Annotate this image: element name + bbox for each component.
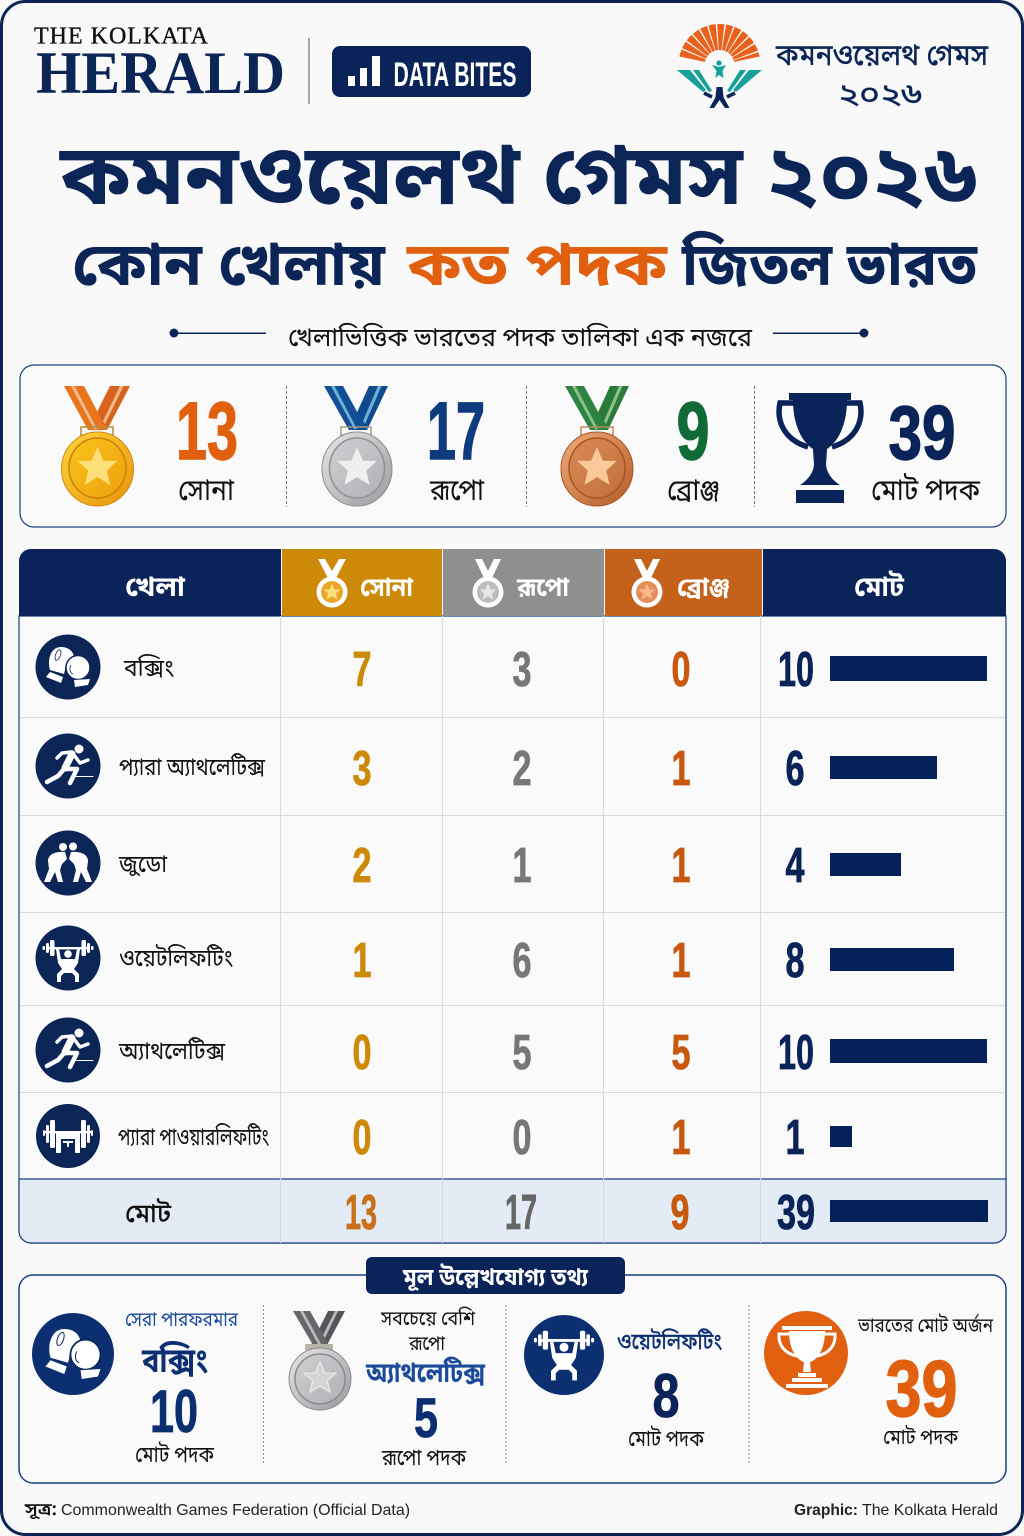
header: publisher masthead: HERALD (36, 40, 285, 106)
row: judo: 4 (786, 839, 804, 893)
gold count (176, 386, 238, 513)
table header: সোনা (360, 572, 414, 607)
highlight: top performer: সেরা পারফরমার (125, 1309, 239, 1335)
trophy icon (779, 393, 861, 503)
silver count: রূপো (429, 473, 485, 513)
row: boxing: 3 (512, 643, 532, 697)
table header: খেলা (125, 571, 186, 608)
title: কমনওয়েলথ গেমস ২০২৬ (59, 128, 977, 239)
table header: মোট (854, 570, 904, 608)
total count (871, 391, 981, 513)
panel: key highlights (19, 1257, 1006, 1483)
highlight: total: ভারতের মোট অর্জন (857, 1312, 994, 1341)
gold medal icon (62, 386, 134, 506)
row: para powerlifting: 0 (512, 1111, 532, 1165)
table header: রূপো (516, 572, 570, 607)
footer: credit (794, 1502, 998, 1519)
highlight: total: 39 (886, 1344, 958, 1433)
highlight: weightlifting: 8 (652, 1362, 680, 1431)
row: para athletics: 6 (786, 742, 804, 796)
footer: source (24, 1499, 410, 1522)
footer: source: সূত্র: (24, 1499, 57, 1522)
silver count (427, 386, 485, 513)
tagline (170, 322, 868, 357)
row: judo: জুডো (118, 850, 168, 882)
row: para athletics: প্যারা অ্যাথলেটিক্স (119, 753, 265, 785)
row: weightlifting: 1 (352, 934, 372, 988)
highlight: most silver: রূপো (408, 1333, 446, 1359)
bronze count: ব্রোঞ্জ (667, 473, 720, 513)
highlight: top performer (32, 1309, 239, 1471)
highlight: most silver: রূপো পদক (381, 1445, 466, 1474)
footer: source: Commonwealth Games Federation (Official Data) (61, 1502, 410, 1519)
bronze header medal (632, 559, 662, 608)
row: para athletics (36, 734, 937, 798)
subtitle headline (72, 231, 978, 310)
footer: credit: The Kolkata Herald (862, 1502, 998, 1519)
row: judo: 1 (672, 839, 690, 893)
gold count: 13 (176, 386, 238, 477)
highlight: most silver: অ্যাথলেটিক্স (365, 1356, 485, 1394)
row: para athletics: 3 (352, 742, 372, 796)
row: athletics: 10 (778, 1026, 814, 1080)
row: athletics: 0 (352, 1026, 372, 1080)
highlight: top performer: 10 (150, 1378, 198, 1445)
row: athletics (36, 1018, 987, 1082)
row: para powerlifting: প্যারা পাওয়ারলিফটিং (118, 1123, 269, 1155)
row: totals: 9 (670, 1186, 690, 1240)
row: boxing: বক্সিং (123, 654, 174, 686)
gold count: সোনা (178, 473, 235, 513)
footer: credit: Graphic: (794, 1502, 858, 1519)
row: athletics: অ্যাথলেটিক্স (118, 1037, 226, 1069)
commonwealth games logo (677, 37, 762, 108)
highlight: total (764, 1311, 994, 1453)
highlight: most silver: 5 (414, 1386, 438, 1449)
bronze count: 9 (676, 386, 710, 477)
highlights heading (366, 1257, 625, 1295)
games name (775, 38, 988, 117)
highlight: most silver (289, 1306, 485, 1474)
data bites badge: DATA BITES (394, 56, 516, 94)
row: weightlifting (36, 926, 954, 990)
row: judo: 2 (352, 839, 372, 893)
table total row background (19, 1179, 1006, 1243)
highlight: weightlifting (524, 1315, 722, 1455)
total count: মোট পদক (871, 472, 981, 513)
silver medal icon (322, 386, 392, 506)
header: publisher masthead: THE KOLKATA (34, 24, 209, 50)
subtitle headline: কোন খেলায় (72, 231, 386, 310)
row: totals: 39 (777, 1186, 815, 1240)
row: totals: 17 (505, 1186, 537, 1240)
highlight: most silver: সবচেয়ে বেশি (380, 1306, 475, 1334)
row: weightlifting: 6 (512, 934, 532, 988)
subtitle headline: জিতল ভারত (681, 231, 978, 310)
medal table (19, 549, 1006, 1243)
table header: ব্রোঞ্জ (677, 572, 730, 607)
highlight: weightlifting: মোট পদক (628, 1426, 704, 1455)
games name: ২০২৬ (838, 77, 922, 117)
row: para athletics: 1 (672, 742, 690, 796)
highlight: weightlifting: ওয়েটলিফটিং (617, 1329, 722, 1358)
row: weightlifting: 8 (786, 934, 804, 988)
tagline: খেলাভিত্তিক ভারতের পদক তালিকা এক নজরে (288, 322, 752, 357)
row: para powerlifting: 0 (352, 1111, 372, 1165)
row: para athletics: 2 (512, 742, 532, 796)
data bites badge (332, 46, 531, 97)
total count: 39 (888, 391, 956, 476)
table header (19, 549, 1006, 616)
row: totals (125, 1186, 988, 1240)
row: boxing: 10 (778, 643, 814, 697)
panel: medal summary (20, 365, 1006, 527)
header divider (308, 38, 310, 104)
row: boxing (36, 634, 987, 700)
highlight: top performer: মোট পদক (135, 1442, 214, 1471)
highlight: top performer: বক্সিং (141, 1340, 208, 1386)
bronze medal icon (561, 386, 633, 506)
bronze count (667, 386, 720, 513)
row: judo: 1 (512, 839, 532, 893)
row: judo (36, 830, 901, 896)
row: para powerlifting: 1 (786, 1111, 804, 1165)
row: athletics: 5 (672, 1026, 690, 1080)
row: para powerlifting (36, 1104, 852, 1168)
row: weightlifting: 1 (672, 934, 690, 988)
row: boxing: 7 (352, 643, 372, 697)
highlight: total: মোট পদক (883, 1425, 959, 1453)
row: weightlifting: ওয়েটলিফটিং (119, 944, 233, 976)
highlights heading: মূল উল্লেখযোগ্য তথ্য (402, 1263, 589, 1295)
row: boxing: 0 (672, 643, 690, 697)
silver header medal (472, 559, 504, 608)
row: para powerlifting: 1 (672, 1111, 690, 1165)
subtitle headline: কত পদক (406, 231, 668, 310)
row: totals: 13 (345, 1186, 377, 1240)
gold header medal (316, 559, 348, 608)
trophy icon white (779, 1326, 835, 1388)
row: totals: মোট (125, 1198, 172, 1233)
silver count: 17 (427, 386, 485, 477)
row: athletics: 5 (512, 1026, 532, 1080)
games name: কমনওয়েলথ গেমস (775, 38, 988, 78)
